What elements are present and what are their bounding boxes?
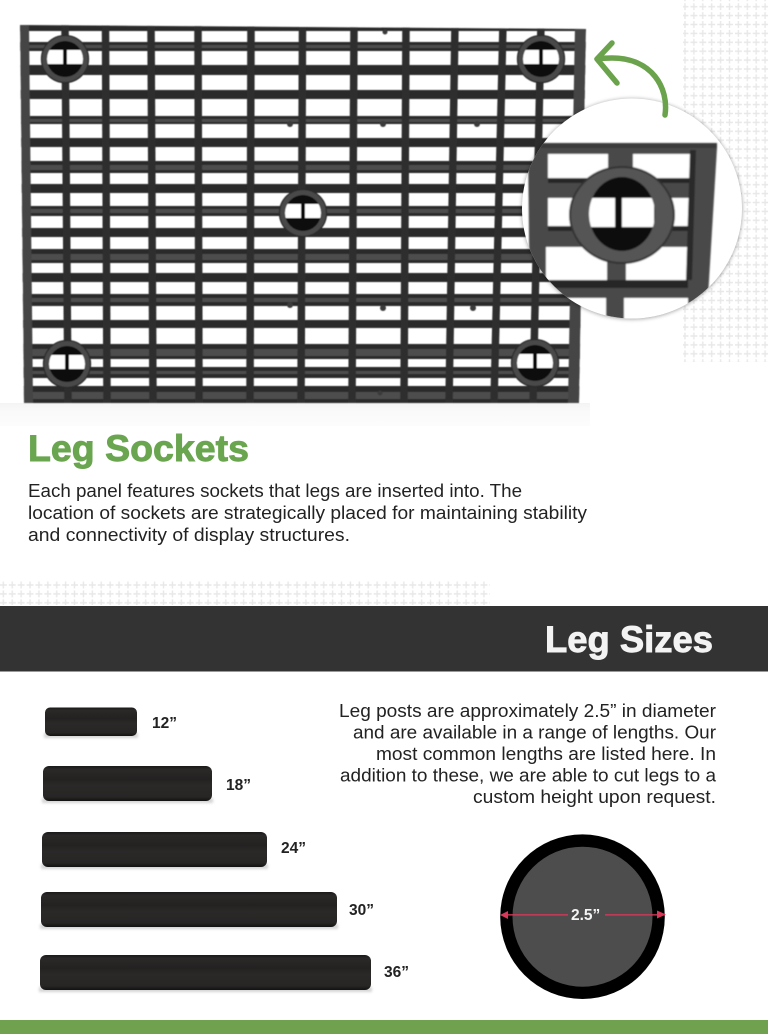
dotted pattern: above band bbox=[0, 580, 490, 605]
text block: leg sockets description: and connectivity of display structures. bbox=[28, 525, 350, 545]
leg: 18 inch bbox=[42, 766, 251, 803]
heading: Leg Sockets: Leg Sockets bbox=[28, 428, 249, 469]
leg: 30 inch bbox=[40, 892, 374, 929]
diagram: leg cross-section 2.5 inch diameter bbox=[500, 834, 666, 999]
text block: leg sizes description: custom height upon request. bbox=[473, 787, 716, 807]
label: diameter: 2.5” bbox=[571, 907, 600, 924]
arrow: from lens to corner socket bbox=[597, 43, 666, 115]
floor shadow below panel bbox=[0, 403, 590, 426]
socket: top right bbox=[518, 36, 564, 82]
text block: leg sockets description: Each panel features sockets that legs are inserted into. The bbox=[28, 481, 522, 501]
text block: leg sizes description bbox=[339, 701, 717, 807]
label: 36 inch: 36” bbox=[384, 964, 409, 981]
text block: leg sizes description: most common lengths are listed here. In bbox=[376, 744, 716, 764]
text block: leg sizes description: Leg posts are approximately 2.5” in diameter bbox=[339, 701, 716, 721]
arrow: right dimension bbox=[605, 910, 666, 918]
dotted pattern: top right bbox=[683, 0, 768, 362]
text block: leg sockets description bbox=[28, 481, 587, 545]
socket: top left bbox=[42, 36, 88, 82]
text block: leg sizes description: and are available in a range of lengths. Our bbox=[353, 722, 716, 742]
socket: bottom right bbox=[512, 340, 558, 386]
leg: 12 inch bbox=[44, 708, 177, 738]
heading: Leg Sizes: Leg Sizes bbox=[545, 619, 713, 660]
leg: 36 inch bbox=[39, 955, 409, 992]
text block: leg sockets description: location of sockets are strategically placed for maintaining stability bbox=[28, 503, 587, 523]
label: 30 inch: 30” bbox=[349, 902, 374, 919]
socket: centre bbox=[280, 190, 326, 236]
socket: bottom left bbox=[44, 340, 90, 388]
footer bar bbox=[0, 1020, 768, 1034]
text block: leg sizes description: addition to these, we are able to cut legs to a bbox=[340, 766, 717, 786]
panel photo: black grid panel with sockets bbox=[15, 24, 590, 403]
label: 24 inch: 24” bbox=[281, 840, 306, 857]
band: Leg Sizes header bbox=[0, 606, 768, 672]
label: 18 inch: 18” bbox=[226, 777, 251, 794]
arrow: left dimension bbox=[500, 911, 568, 919]
magnifier lens shadow bbox=[522, 99, 742, 319]
label: 12 inch: 12” bbox=[152, 715, 177, 732]
leg: 24 inch bbox=[41, 832, 306, 869]
magnifier lens: socket close-up bbox=[522, 98, 742, 330]
